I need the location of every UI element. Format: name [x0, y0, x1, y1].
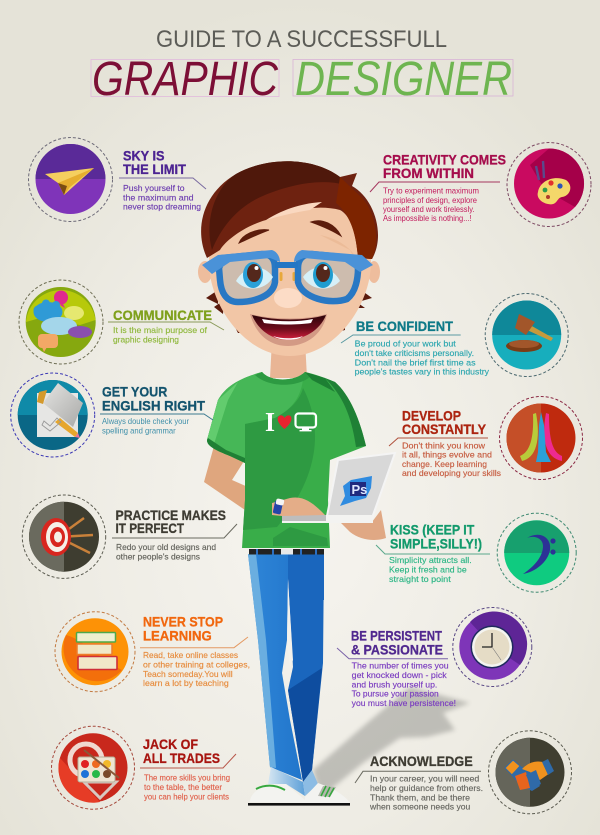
body text: straight to point	[389, 574, 451, 584]
heading: BE PERSISTENT	[351, 628, 442, 644]
character lower hand	[340, 510, 386, 540]
heading: DEVELOP	[402, 408, 461, 424]
nose	[274, 272, 302, 308]
connector	[140, 637, 248, 648]
connector	[100, 414, 213, 420]
body text: it all, things evolve and	[402, 450, 492, 460]
heading: PRACTICE MAKES	[116, 507, 226, 523]
body text: In your career, you will need	[370, 774, 480, 784]
heading: SIMPLE,SILLY!)	[390, 535, 482, 551]
icon: wall clock	[453, 608, 532, 686]
body text: change. Keep learning	[402, 459, 487, 469]
drop shadow of character	[313, 687, 470, 790]
face	[209, 198, 371, 356]
body text: spelling and grammar	[102, 426, 176, 436]
panel: be confident	[341, 294, 568, 377]
character shoes	[248, 783, 350, 806]
icon: bass clef	[497, 513, 576, 592]
heading	[390, 521, 482, 551]
connector	[341, 335, 461, 343]
body text	[355, 339, 490, 377]
panel: practice makes it perfect	[22, 495, 237, 578]
icon: handshake	[488, 731, 572, 814]
icon: stack of books	[55, 612, 135, 692]
body text: Always double check your	[102, 416, 189, 426]
body text: people's tastes vary in this industry	[355, 367, 490, 377]
heading: ENGLISH RIGHT	[102, 398, 205, 414]
heading: JACK OF	[143, 736, 198, 752]
body text	[113, 325, 208, 345]
eyebrows	[239, 230, 269, 243]
heading: CONSTANTLY	[402, 421, 487, 437]
body text: Don't nail the brief first time as	[355, 358, 476, 368]
heading: LEARNING	[143, 628, 212, 644]
body text: help or guidance from others.	[370, 783, 483, 793]
body text: principles of design, explore	[383, 195, 477, 205]
heading: IT PERFECT	[116, 520, 184, 536]
panel: creativity comes from within	[370, 142, 591, 226]
body text: and brush yourself up.	[352, 680, 437, 690]
character head	[198, 161, 380, 356]
body text: learn a lot by teaching	[143, 678, 229, 688]
body text: the maximum and	[123, 192, 194, 202]
connector	[119, 178, 206, 189]
body text: The more skills you bring	[144, 773, 230, 783]
body text: graphic designing	[113, 335, 179, 345]
heading: BE CONFIDENT	[356, 318, 453, 334]
icon: gavel	[485, 294, 568, 376]
heading	[102, 384, 205, 414]
mouth	[250, 314, 327, 346]
title word: designer: DESIGNER	[295, 53, 512, 106]
heading: COMMUNICATE	[113, 307, 212, 323]
icon: speech bubbles	[19, 280, 103, 364]
heading: & PASSIONATE	[351, 641, 443, 657]
body text: to the table, the better	[144, 782, 222, 792]
heading: ACKNOWLEDGE	[370, 753, 473, 769]
icon: paint box	[52, 726, 134, 809]
body text: you must have persistence!	[352, 698, 456, 708]
body text	[369, 774, 483, 812]
body text: Redo your old designs and	[116, 542, 216, 552]
body text: Read, take online classes	[143, 650, 238, 660]
icon: growth arrows	[500, 396, 582, 480]
body text	[143, 650, 250, 688]
body text: Try to experiment maximum	[383, 186, 479, 196]
heading: THE LIMIT	[123, 161, 186, 177]
body text: never stop dreaming	[123, 202, 201, 212]
body text: It is the main purpose of	[113, 325, 208, 335]
heading: FROM WITHIN	[383, 165, 474, 181]
title line: guide to a successfull: GUIDE TO A SUCCESSFULL	[156, 26, 447, 53]
heading: SKY IS	[123, 148, 164, 164]
icon: palette	[507, 142, 591, 226]
heading	[383, 152, 506, 181]
connector	[376, 545, 490, 554]
body text: Push yourself to	[123, 183, 185, 193]
body text: don't take criticisms personally.	[355, 348, 474, 358]
panel: get your english right	[11, 373, 213, 457]
connector	[355, 771, 481, 783]
body text: when someone needs you	[369, 802, 471, 812]
heading	[116, 507, 226, 536]
panel: never stop learning	[55, 612, 250, 692]
connector	[389, 438, 488, 446]
body text: or other training at colleges,	[143, 660, 250, 670]
ears and side hair	[198, 261, 380, 334]
body text	[352, 661, 456, 708]
eyes	[236, 262, 340, 289]
laptop	[282, 453, 395, 523]
body text: Teach someday.You will	[143, 669, 233, 679]
body text	[102, 416, 189, 436]
character t-shirt	[207, 372, 366, 548]
heading	[351, 628, 443, 657]
body text: and developing your skills	[402, 468, 501, 478]
heading: KISS (KEEP IT	[390, 521, 475, 537]
connector	[112, 524, 237, 538]
body text: The number of times you	[352, 661, 449, 671]
body text	[389, 555, 472, 584]
connector	[140, 754, 236, 768]
body text	[144, 773, 230, 802]
panel: sky is the limit	[28, 138, 206, 222]
heading	[143, 614, 223, 644]
heading	[143, 736, 220, 766]
character front hand and watch	[272, 497, 325, 516]
icon: paper and pencil	[11, 373, 95, 457]
body text	[383, 186, 479, 223]
body text: Simplicity attracts all.	[389, 555, 472, 565]
glasses	[202, 250, 373, 302]
heading: CREATIVITY COMES	[383, 152, 506, 168]
heading: NEVER STOP	[143, 614, 223, 630]
icon: paper plane	[28, 138, 112, 222]
icon: target and arrows	[22, 495, 106, 578]
body text: yourself and work tirelessly.	[383, 204, 474, 214]
t-shirt print: i love computers: I	[265, 407, 275, 437]
character neck	[270, 340, 307, 378]
t-shirt print: i love computers	[265, 407, 316, 437]
panel: communicate	[19, 280, 224, 364]
body text: get knocked down - pick	[352, 670, 448, 680]
body text: As impossible is nothing...!	[383, 213, 472, 223]
heading: ALL TRADES	[143, 750, 220, 766]
body text	[116, 542, 216, 561]
body text: other people's designs	[116, 551, 200, 561]
connector	[337, 648, 448, 659]
body text	[402, 440, 501, 478]
title	[91, 26, 513, 106]
body text: you can help your clients	[144, 792, 229, 802]
character legs	[248, 554, 324, 796]
panel: acknowledge	[355, 731, 572, 814]
heading	[123, 148, 186, 177]
photoshop logo: Ps	[352, 482, 367, 497]
character belt	[249, 549, 324, 554]
body text	[123, 183, 201, 212]
connector	[370, 182, 500, 192]
panel: develop constantly	[389, 396, 582, 480]
body text: Don't think you know	[402, 440, 486, 450]
heading	[402, 408, 487, 437]
body text: Keep it fresh and be	[389, 565, 467, 575]
heading: GET YOUR	[102, 384, 167, 400]
hair	[201, 161, 378, 259]
character	[198, 161, 395, 806]
character back arm	[204, 446, 275, 516]
body text: To pursue your passion	[352, 689, 439, 699]
panel: be persistent and passionate	[337, 608, 532, 708]
title word: graphic: GRAPHIC	[92, 53, 278, 106]
panel: kiss keep it simple silly	[376, 513, 576, 592]
body text: Thank them, and be there	[370, 793, 470, 803]
body text: Be proud of your work but	[355, 339, 456, 349]
panel: jack of all trades	[52, 726, 236, 809]
connector	[108, 322, 224, 330]
